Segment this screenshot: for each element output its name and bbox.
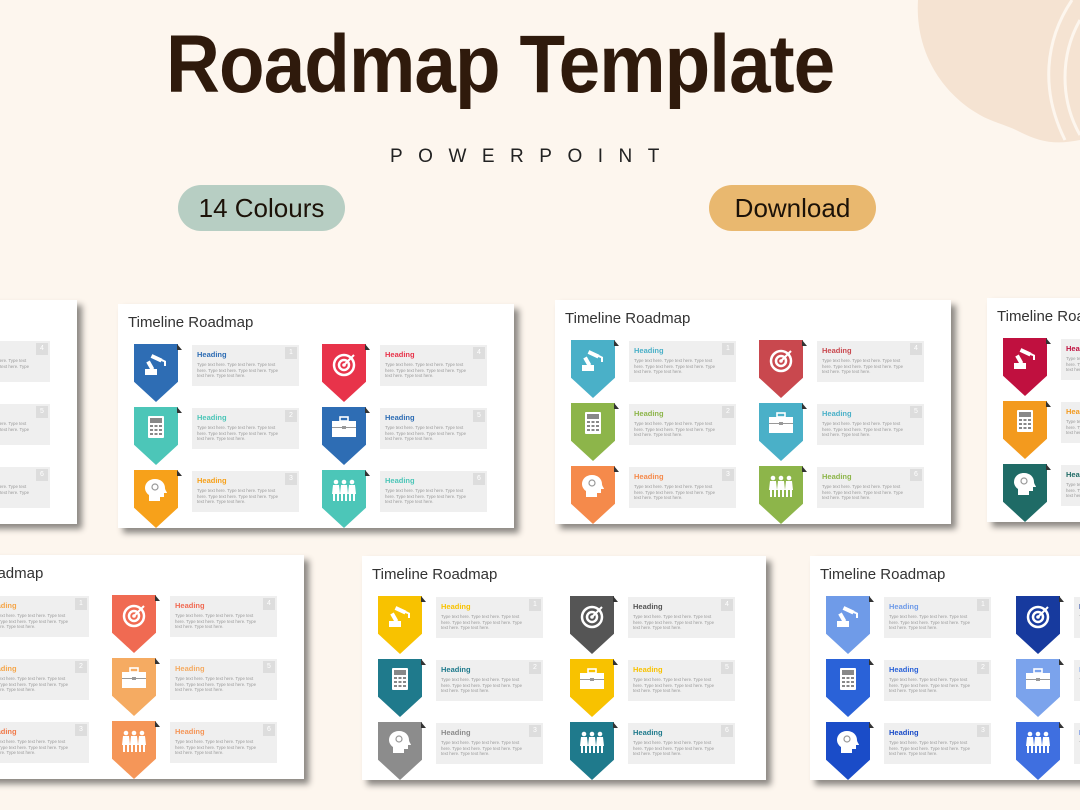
slide 6: 1 <box>533 601 537 608</box>
slide 7 (partial right): Type text here. Type text here. Type text here. Type text here. Type text here. Type text here. Type text here. <box>889 677 970 693</box>
slide 7 (partial right): Type text here. Type text here. Type text here. Type text here. Type text here. Type text here. Type text here. <box>889 740 970 756</box>
slide 5 (partial bottom left): 1 <box>79 600 83 607</box>
slide 3: Heading <box>634 409 664 418</box>
slide 7 (partial right): 3 <box>981 727 985 734</box>
slide 2: 3 <box>289 475 293 482</box>
slide 6: 4 <box>725 601 729 608</box>
slide 5 (partial bottom left): 3 <box>79 726 83 733</box>
slide 2: Heading <box>197 476 227 485</box>
slide 6: 2 <box>533 664 537 671</box>
slide 5 (partial bottom left): Heading <box>175 664 205 673</box>
slide 7 (partial right): Timeline Roadmap <box>820 566 945 583</box>
slide 2: Type text here. Type text here. Type text here. Type text here. Type text here. Type text here. Type text here. <box>197 488 278 504</box>
slide 5 (partial bottom left): Heading <box>175 601 205 610</box>
decorative blob top right <box>918 0 1080 142</box>
slide 1 (partial left): 4 <box>40 345 44 352</box>
slide 2: Heading <box>197 413 227 422</box>
slide 1 (partial left) <box>0 300 77 524</box>
slide 2: Type text here. Type text here. Type text here. Type text here. Type text here. Type text here. Type text here. <box>385 362 466 378</box>
slide 3: Type text here. Type text here. Type text here. Type text here. Type text here. Type text here. Type text here. <box>822 421 903 437</box>
slide 3: Type text here. Type text here. Type text here. Type text here. Type text here. Type text here. Type text here. <box>634 421 715 437</box>
slide 3: Type text here. Type text here. Type text here. Type text here. Type text here. Type text here. Type text here. <box>634 484 715 500</box>
slide 3: 6 <box>914 471 918 478</box>
slide 3: Heading <box>634 346 664 355</box>
slide 6: Heading <box>441 602 471 611</box>
slide 2: Heading <box>385 476 415 485</box>
slide 6: Heading <box>633 602 663 611</box>
slide 3: Heading <box>634 472 664 481</box>
slide 2: Type text here. Type text here. Type text here. Type text here. Type text here. Type text here. Type text here. <box>197 362 278 378</box>
slide 2: 5 <box>477 412 481 419</box>
slide 6: 5 <box>725 664 729 671</box>
slide 6: 6 <box>725 727 729 734</box>
slide 5 (partial bottom left) <box>0 555 304 779</box>
slide 5 (partial bottom left): Type text here. Type text here. Type text here. Type text here. Type text here. Type text here. Type text here. <box>175 613 256 629</box>
slide 7 (partial right): 1 <box>981 601 985 608</box>
slide 5 (partial bottom left): Heading <box>175 727 205 736</box>
slide 3: Type text here. Type text here. Type text here. Type text here. Type text here. Type text here. Type text here. <box>634 358 715 374</box>
slide 7 (partial right): Type text here. Type text here. Type text here. Type text here. Type text here. Type text here. Type text here. <box>889 614 970 630</box>
slide 2: Heading <box>197 350 227 359</box>
slide 5 (partial bottom left): 4 <box>267 600 271 607</box>
slide 5 (partial bottom left): Type text here. Type text here. Type text here. Type text here. Type text here. Type text here. Type text here. <box>175 676 256 692</box>
slide 6: 3 <box>533 727 537 734</box>
slide 2: Heading <box>385 413 415 422</box>
slide 6: Heading <box>633 665 663 674</box>
slide 3: Heading <box>822 472 852 481</box>
slide 6: Type text here. Type text here. Type text here. Type text here. Type text here. Type text here. Type text here. <box>441 740 522 756</box>
slide 2: Type text here. Type text here. Type text here. Type text here. Type text here. Type text here. Type text here. <box>385 488 466 504</box>
subtitle: POWERPOINT <box>390 146 675 167</box>
slide 3: Heading <box>822 346 852 355</box>
slide 6: Type text here. Type text here. Type text here. Type text here. Type text here. Type text here. Type text here. <box>441 614 522 630</box>
pill: download: Download <box>735 193 850 223</box>
slide 5 (partial bottom left): Type text here. Type text here. Type text here. Type text here. Type text here. Type text here. Type text here. <box>175 739 256 755</box>
slide 3: 3 <box>726 471 730 478</box>
pill: 14 colours <box>178 185 345 231</box>
slide 7 (partial right): Heading <box>889 602 919 611</box>
slide 5 (partial bottom left): 2 <box>79 663 83 670</box>
slide 6: Type text here. Type text here. Type text here. Type text here. Type text here. Type text here. Type text here. <box>441 677 522 693</box>
pill: 14 colours: 14 Colours <box>199 193 324 223</box>
slide 5 (partial bottom left): 6 <box>267 726 271 733</box>
slide 6: Type text here. Type text here. Type text here. Type text here. Type text here. Type text here. Type text here. <box>633 677 714 693</box>
slide 6: Heading <box>441 665 471 674</box>
slide 2: Type text here. Type text here. Type text here. Type text here. Type text here. Type text here. Type text here. <box>197 425 278 441</box>
title: Roadmap Template <box>166 19 834 110</box>
slide 3: 1 <box>726 345 730 352</box>
slide 7 (partial right): Heading <box>889 728 919 737</box>
slide 3: Timeline Roadmap <box>565 310 690 327</box>
slide 2: 2 <box>289 412 293 419</box>
pill: download <box>709 185 876 231</box>
slide 2: Heading <box>385 350 415 359</box>
slide 3: Heading <box>822 409 852 418</box>
slide 6: Type text here. Type text here. Type text here. Type text here. Type text here. Type text here. Type text here. <box>633 740 714 756</box>
slide 1 (partial left): 6 <box>40 471 44 478</box>
slide 3: 5 <box>914 408 918 415</box>
slide 5 (partial bottom left): 5 <box>267 663 271 670</box>
slide 3 <box>555 300 951 524</box>
slide 6: Type text here. Type text here. Type text here. Type text here. Type text here. Type text here. Type text here. <box>633 614 714 630</box>
slide 2: 4 <box>477 349 481 356</box>
slide 6 <box>362 556 766 780</box>
slide 2: Type text here. Type text here. Type text here. Type text here. Type text here. Type text here. Type text here. <box>385 425 466 441</box>
slide 7 (partial right) <box>810 556 1080 780</box>
slide 6: Heading <box>441 728 471 737</box>
slide 6: Timeline Roadmap <box>372 566 497 583</box>
slide 1 (partial left): 5 <box>40 408 44 415</box>
slide 2 <box>118 304 514 528</box>
slide 7 (partial right): Heading <box>889 665 919 674</box>
slide 4 (partial right) <box>987 298 1080 522</box>
slide 3: 2 <box>726 408 730 415</box>
slide 3: Type text here. Type text here. Type text here. Type text here. Type text here. Type text here. Type text here. <box>822 484 903 500</box>
slide 3: 4 <box>914 345 918 352</box>
slide 2: 1 <box>289 349 293 356</box>
slide 6: Heading <box>633 728 663 737</box>
slide 2: 6 <box>477 475 481 482</box>
slide 7 (partial right): 2 <box>981 664 985 671</box>
slide 3: Type text here. Type text here. Type text here. Type text here. Type text here. Type text here. Type text here. <box>822 358 903 374</box>
slide 2: Timeline Roadmap <box>128 314 253 331</box>
